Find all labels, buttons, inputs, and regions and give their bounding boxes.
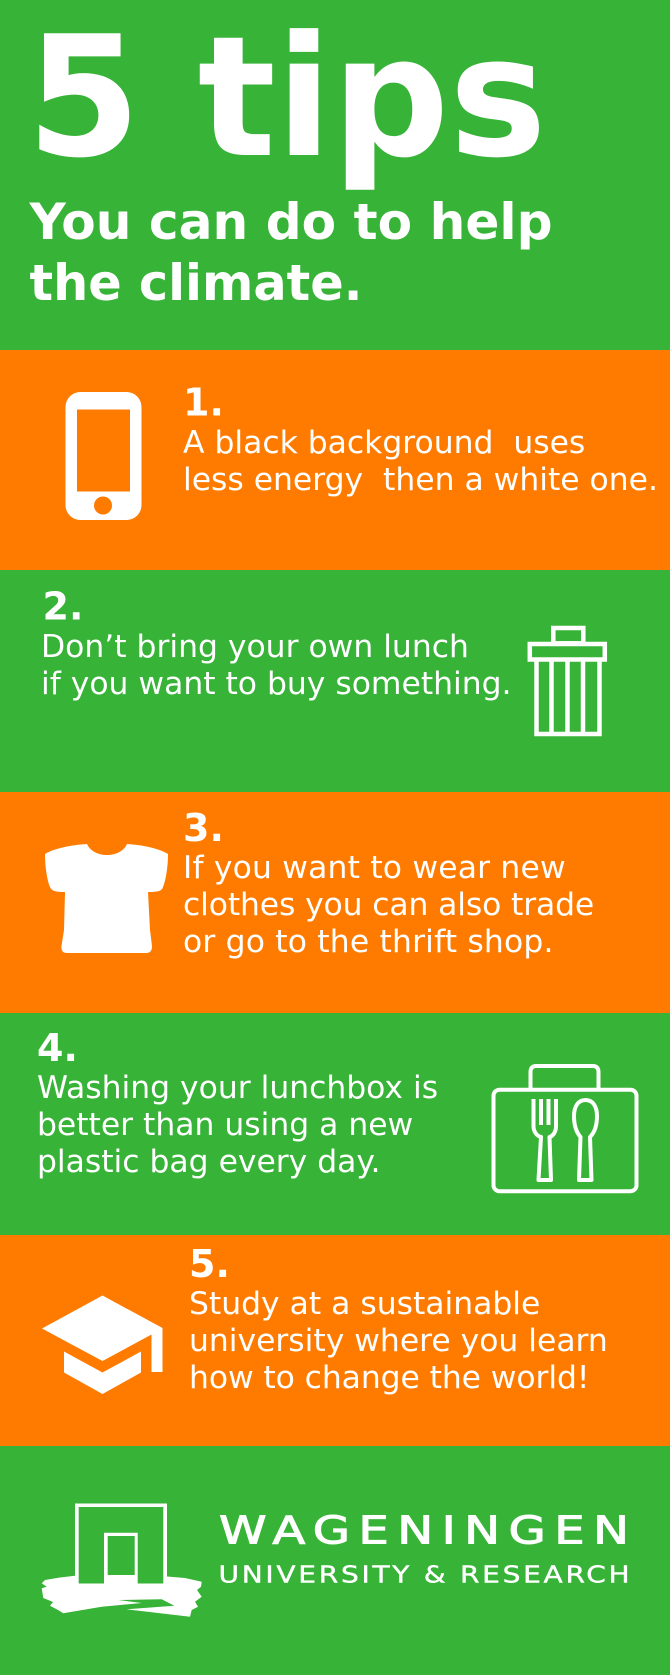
tip 2 number: 2. — [42, 584, 83, 628]
tip 5 text: university where you learn — [189, 1323, 608, 1359]
icon: smartphone — [66, 392, 142, 520]
panel: tip 1 — [0, 350, 670, 570]
tip 4 text: Washing your lunchbox is — [37, 1070, 438, 1106]
panel: tip 5 — [0, 1235, 670, 1446]
icon: trash can — [530, 628, 605, 734]
panel: header — [0, 0, 670, 350]
panel: tip 2 — [0, 570, 670, 792]
tip 4 text: plastic bag every day. — [37, 1144, 380, 1180]
icon: graduation cap — [42, 1296, 162, 1394]
icon: t-shirt — [45, 844, 168, 953]
icon: lunchbox — [494, 1066, 636, 1191]
logo wordmark: WAGENINGEN — [219, 1509, 629, 1553]
tip 1 text: less energy then a white one. — [183, 462, 658, 498]
logo subtitle: UNIVERSITY & RESEARCH — [218, 1562, 630, 1589]
panel: tip 4 — [0, 1013, 670, 1235]
tip 5 text: how to change the world! — [189, 1360, 589, 1396]
subtitle — [28, 193, 553, 312]
tip 4 number: 4. — [37, 1026, 78, 1070]
tip 2 text: Don’t bring your own lunch — [41, 629, 469, 665]
tip 3 text: If you want to wear new — [183, 850, 566, 886]
panel: tip 3 — [0, 792, 670, 1013]
subtitle: the climate. — [30, 254, 362, 312]
panel: footer logo — [0, 1446, 670, 1675]
tip 3 text: or go to the thrift shop. — [183, 924, 554, 960]
tip 4 text: better than using a new — [37, 1107, 413, 1143]
icon: Wageningen logo — [42, 1504, 202, 1617]
tip 1 text: A black background uses — [183, 425, 585, 461]
tip 3 text: clothes you can also trade — [183, 887, 594, 923]
title: 5 tips — [27, 1, 547, 195]
tip 5 number: 5. — [189, 1242, 230, 1286]
tip 2 text: if you want to buy something. — [41, 666, 512, 702]
tip 3 number: 3. — [183, 806, 224, 850]
tip 5 text: Study at a sustainable — [189, 1286, 540, 1322]
tip 1 number: 1. — [183, 380, 224, 424]
subtitle: You can do to help — [28, 193, 553, 251]
